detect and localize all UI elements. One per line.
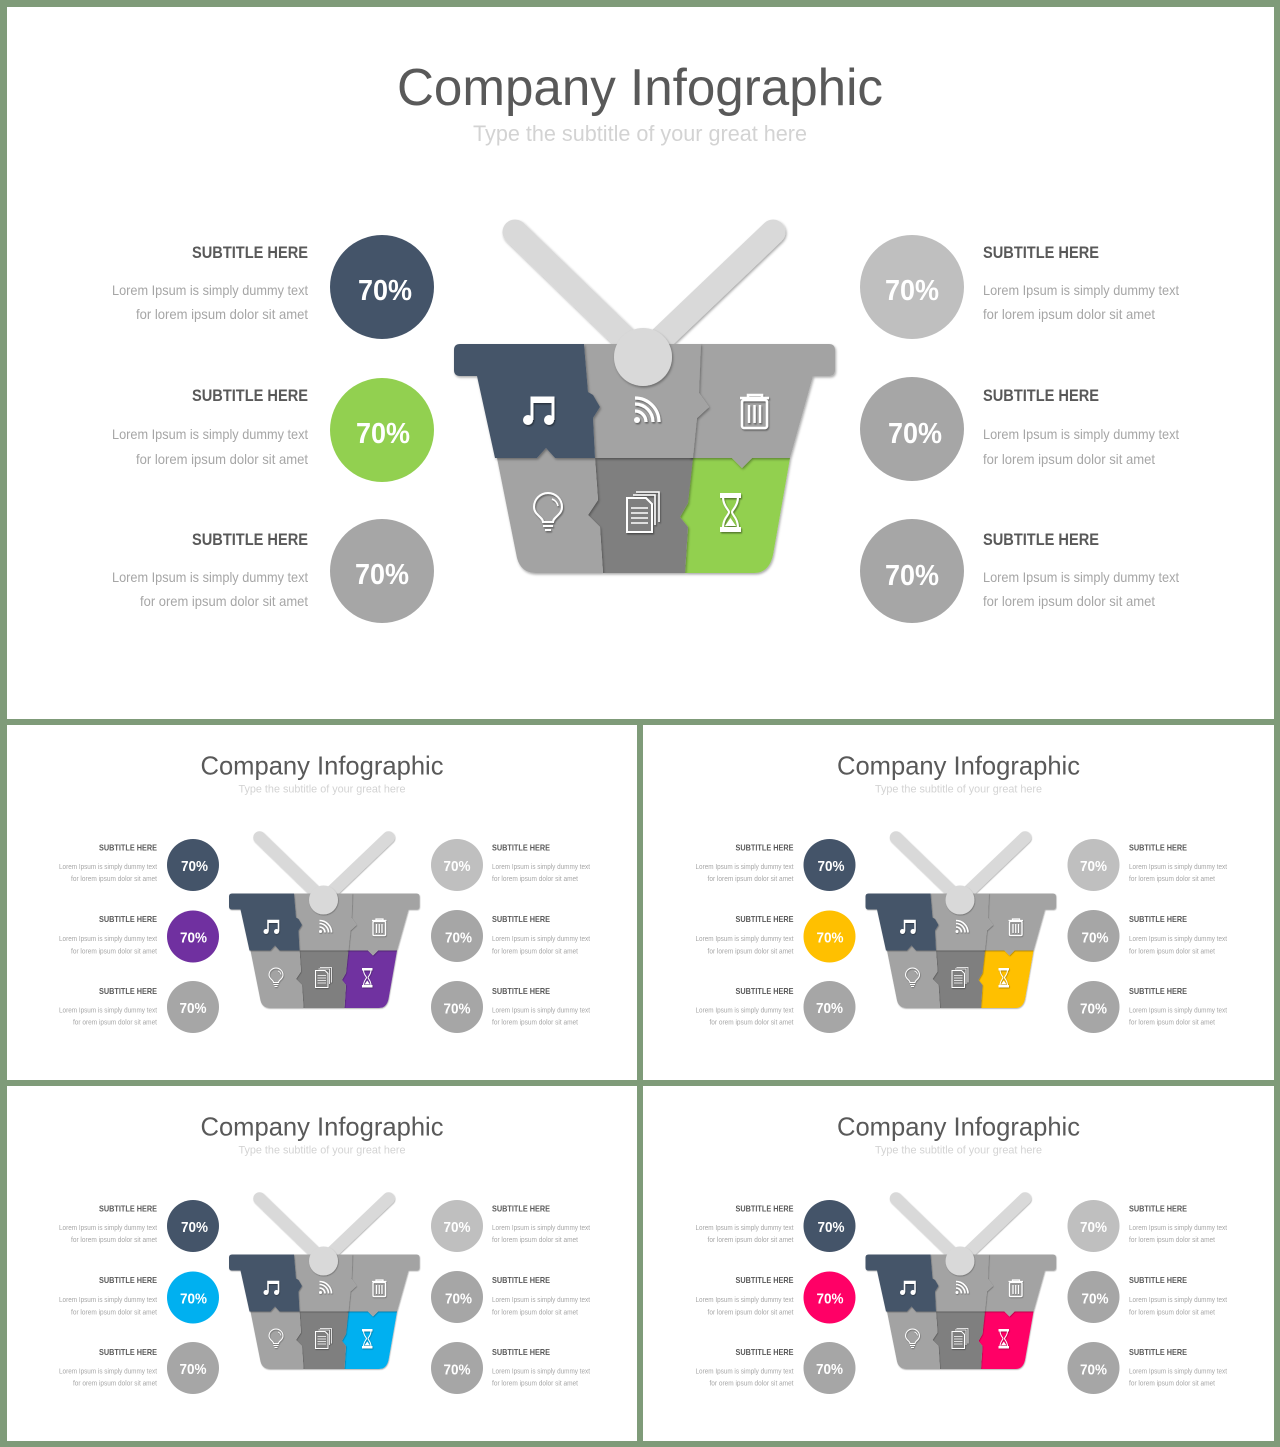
left text blocks: for lorem ipsum dolor sit amet bbox=[71, 948, 157, 956]
left circles: 70% bbox=[816, 1292, 844, 1308]
right text blocks: SUBTITLE HERE bbox=[492, 842, 550, 852]
text block: left row 1: SUBTITLE HERE bbox=[192, 243, 308, 262]
right circles: 70% bbox=[1080, 1002, 1107, 1018]
right circles: 70% bbox=[444, 1220, 471, 1236]
left text blocks: Lorem Ipsum is simply dummy text bbox=[59, 1008, 157, 1014]
right text blocks: SUBTITLE HERE bbox=[492, 986, 550, 996]
left text blocks: Lorem Ipsum is simply dummy text bbox=[59, 864, 157, 871]
left text blocks: Lorem Ipsum is simply dummy text bbox=[696, 1297, 794, 1304]
right circles bbox=[431, 839, 483, 1033]
left text blocks: Lorem Ipsum is simply dummy text bbox=[696, 1225, 794, 1232]
left text blocks: for lorem ipsum dolor sit amet bbox=[71, 1237, 157, 1244]
text block: left row 3 bbox=[112, 530, 308, 609]
subtitle: Type the subtitle of your great here bbox=[875, 1144, 1042, 1156]
left circles: 70% bbox=[181, 859, 208, 875]
circle: right 2: 70% bbox=[888, 418, 942, 450]
left text blocks bbox=[696, 1204, 794, 1388]
text block: left row 3: SUBTITLE HERE bbox=[192, 530, 308, 549]
circle: right 2 bbox=[860, 377, 964, 481]
left text blocks: SUBTITLE HERE bbox=[736, 1204, 794, 1214]
left text blocks: for lorem ipsum dolor sit amet bbox=[708, 948, 794, 956]
text block: left row 3: Lorem Ipsum is simply dummy text bbox=[112, 569, 308, 585]
right text blocks: SUBTITLE HERE bbox=[1129, 842, 1187, 852]
right text blocks: Lorem Ipsum is simply dummy text bbox=[1129, 1225, 1227, 1232]
right text blocks: for lorem ipsum dolor sit amet bbox=[1129, 1237, 1215, 1244]
left text blocks: for orem ipsum dolor sit amet bbox=[73, 1020, 157, 1026]
left circles: 70% bbox=[818, 859, 845, 875]
right circles: 70% bbox=[445, 930, 472, 946]
right circles: 70% bbox=[1082, 930, 1109, 946]
right text blocks: Lorem Ipsum is simply dummy text bbox=[492, 1368, 590, 1376]
right text blocks: SUBTITLE HERE bbox=[1129, 1347, 1187, 1357]
text block: left row 2: Lorem Ipsum is simply dummy text bbox=[112, 426, 308, 442]
left text blocks: for lorem ipsum dolor sit amet bbox=[71, 876, 157, 883]
circle: left 2 accent: 70% bbox=[356, 418, 410, 450]
left text blocks bbox=[696, 842, 794, 1026]
right circles: 70% bbox=[444, 859, 471, 875]
right text blocks: for lorem ipsum dolor sit amet bbox=[1129, 1310, 1215, 1316]
text block: right row 2: SUBTITLE HERE bbox=[983, 386, 1099, 405]
right circles: 70% bbox=[1082, 1292, 1109, 1308]
left text blocks: for orem ipsum dolor sit amet bbox=[73, 1380, 157, 1388]
subtitle: Type the subtitle of your great here bbox=[238, 1144, 406, 1156]
right text blocks: for lorem ipsum dolor sit amet bbox=[492, 1237, 578, 1244]
title: Company Infographic bbox=[837, 1112, 1080, 1142]
right text blocks: for lorem ipsum dolor sit amet bbox=[1129, 1380, 1215, 1388]
right circles: 70% bbox=[444, 1002, 471, 1018]
slide content: yellow bbox=[696, 750, 1227, 1033]
text block: right row 3: Lorem Ipsum is simply dummy text bbox=[983, 569, 1179, 585]
left text blocks: SUBTITLE HERE bbox=[99, 842, 157, 852]
text block: right row 1 bbox=[983, 243, 1179, 322]
text block: right row 1: Lorem Ipsum is simply dummy text bbox=[983, 282, 1179, 298]
left circles: 70% bbox=[180, 930, 207, 946]
panel: main slide bbox=[7, 7, 1274, 719]
panel: pink variant slide bbox=[643, 1086, 1274, 1441]
left text blocks: Lorem Ipsum is simply dummy text bbox=[696, 1368, 794, 1376]
left text blocks: Lorem Ipsum is simply dummy text bbox=[696, 936, 794, 943]
subtitle: Type the subtitle of your great here bbox=[473, 121, 807, 146]
left text blocks: SUBTITLE HERE bbox=[736, 842, 794, 852]
text block: right row 1: for lorem ipsum dolor sit amet bbox=[983, 306, 1155, 322]
left text blocks: for lorem ipsum dolor sit amet bbox=[708, 1237, 794, 1244]
right text blocks: for lorem ipsum dolor sit amet bbox=[492, 876, 578, 883]
right text blocks: Lorem Ipsum is simply dummy text bbox=[492, 864, 590, 871]
panel: purple variant slide bbox=[7, 725, 637, 1080]
slide content: pink bbox=[696, 1112, 1227, 1394]
left text blocks: Lorem Ipsum is simply dummy text bbox=[59, 1297, 157, 1304]
right text blocks: SUBTITLE HERE bbox=[492, 914, 550, 924]
left circles: 70% bbox=[818, 1220, 845, 1236]
right text blocks: Lorem Ipsum is simply dummy text bbox=[492, 1297, 590, 1304]
basket chart bbox=[866, 1198, 1056, 1369]
left text blocks: SUBTITLE HERE bbox=[99, 986, 157, 996]
left text blocks bbox=[59, 842, 157, 1026]
left text blocks: SUBTITLE HERE bbox=[736, 986, 794, 996]
text block: left row 1: for lorem ipsum dolor sit amet bbox=[136, 306, 308, 322]
left circles: 70% bbox=[180, 1292, 207, 1308]
right text blocks: SUBTITLE HERE bbox=[492, 1204, 550, 1214]
text block: right row 2 bbox=[983, 386, 1179, 467]
circle: right 1 bbox=[860, 235, 964, 339]
basket chart bbox=[229, 1198, 420, 1369]
left circles: 70% bbox=[181, 1220, 208, 1236]
right text blocks: Lorem Ipsum is simply dummy text bbox=[1129, 1008, 1227, 1014]
circle: left 2 accent bbox=[330, 378, 434, 482]
left text blocks: SUBTITLE HERE bbox=[736, 1347, 794, 1357]
left text blocks bbox=[59, 1204, 157, 1388]
text block: left row 2: for lorem ipsum dolor sit amet bbox=[136, 451, 308, 467]
right text blocks: for lorem ipsum dolor sit amet bbox=[1129, 876, 1215, 883]
right text blocks bbox=[1129, 1204, 1227, 1388]
left text blocks: for lorem ipsum dolor sit amet bbox=[708, 876, 794, 883]
left circles bbox=[167, 1200, 219, 1394]
left text blocks: SUBTITLE HERE bbox=[736, 914, 794, 924]
right circles: 70% bbox=[1080, 1220, 1107, 1236]
subtitle: Type the subtitle of your great here bbox=[238, 784, 406, 796]
right text blocks: for lorem ipsum dolor sit amet bbox=[492, 1380, 578, 1388]
text block: right row 3: for lorem ipsum dolor sit amet bbox=[983, 593, 1155, 609]
right circles: 70% bbox=[1080, 1362, 1107, 1378]
circle: right 3: 70% bbox=[885, 560, 939, 592]
circle: left 3: 70% bbox=[355, 559, 409, 591]
text block: right row 2: Lorem Ipsum is simply dummy text bbox=[983, 426, 1179, 442]
circle: left 3 bbox=[330, 519, 434, 623]
right circles bbox=[1068, 1200, 1120, 1394]
left text blocks: Lorem Ipsum is simply dummy text bbox=[696, 864, 794, 871]
circle: left 1 bbox=[330, 235, 434, 339]
title: Company Infographic bbox=[837, 750, 1080, 780]
slide content: purple bbox=[59, 750, 590, 1033]
right text blocks: SUBTITLE HERE bbox=[492, 1275, 550, 1285]
right circles bbox=[1068, 839, 1120, 1033]
slide content: blue bbox=[59, 1112, 590, 1394]
right text blocks bbox=[492, 1204, 590, 1388]
circle: right 1: 70% bbox=[885, 275, 939, 307]
text block: right row 1: SUBTITLE HERE bbox=[983, 243, 1099, 262]
right circles: 70% bbox=[444, 1362, 471, 1378]
left circles: 70% bbox=[816, 1001, 843, 1017]
right text blocks: for lorem ipsum dolor sit amet bbox=[492, 1310, 578, 1316]
subtitle: Type the subtitle of your great here bbox=[875, 784, 1042, 796]
left text blocks: Lorem Ipsum is simply dummy text bbox=[696, 1008, 794, 1014]
right text blocks: for lorem ipsum dolor sit amet bbox=[1129, 1020, 1215, 1026]
left text blocks: Lorem Ipsum is simply dummy text bbox=[59, 936, 157, 943]
right text blocks: Lorem Ipsum is simply dummy text bbox=[1129, 936, 1227, 943]
left circles: 70% bbox=[816, 930, 844, 946]
right circles bbox=[431, 1200, 483, 1394]
text block: left row 1 bbox=[112, 243, 308, 322]
left circles bbox=[804, 839, 856, 1033]
text block: right row 3 bbox=[983, 530, 1179, 609]
right circles: 70% bbox=[445, 1292, 472, 1308]
right text blocks: SUBTITLE HERE bbox=[1129, 1275, 1187, 1285]
right text blocks: SUBTITLE HERE bbox=[492, 1347, 550, 1357]
left circles bbox=[804, 1200, 856, 1394]
left circles: 70% bbox=[180, 1362, 207, 1378]
title: Company Infographic bbox=[200, 750, 444, 780]
left text blocks: for lorem ipsum dolor sit amet bbox=[708, 1310, 794, 1316]
left circles: 70% bbox=[816, 1362, 843, 1378]
left circles: 70% bbox=[180, 1001, 207, 1017]
left text blocks: for orem ipsum dolor sit amet bbox=[710, 1020, 794, 1026]
basket chart bbox=[866, 838, 1056, 1008]
text block: left row 2 bbox=[112, 386, 308, 467]
right text blocks bbox=[492, 842, 590, 1026]
text block: right row 3: SUBTITLE HERE bbox=[983, 530, 1099, 549]
basket chart bbox=[229, 838, 420, 1008]
left text blocks: SUBTITLE HERE bbox=[736, 1275, 794, 1285]
right text blocks bbox=[1129, 842, 1227, 1026]
circle: right 3 bbox=[860, 519, 964, 623]
left text blocks: SUBTITLE HERE bbox=[99, 1275, 157, 1285]
title: Company Infographic bbox=[397, 59, 883, 117]
right text blocks: Lorem Ipsum is simply dummy text bbox=[1129, 1368, 1227, 1376]
left text blocks: Lorem Ipsum is simply dummy text bbox=[59, 1368, 157, 1376]
right text blocks: for lorem ipsum dolor sit amet bbox=[492, 1020, 578, 1026]
right text blocks: Lorem Ipsum is simply dummy text bbox=[492, 1008, 590, 1014]
left circles bbox=[167, 839, 219, 1033]
left text blocks: SUBTITLE HERE bbox=[99, 1204, 157, 1214]
basket chart bbox=[454, 232, 835, 573]
text block: left row 2: SUBTITLE HERE bbox=[192, 386, 308, 405]
panel: blue variant slide bbox=[7, 1086, 637, 1441]
right text blocks: Lorem Ipsum is simply dummy text bbox=[1129, 864, 1227, 871]
panel: yellow variant slide bbox=[643, 725, 1274, 1080]
title: Company Infographic bbox=[200, 1112, 444, 1142]
circle: left 1: 70% bbox=[358, 275, 412, 307]
right circles: 70% bbox=[1080, 859, 1107, 875]
text block: right row 2: for lorem ipsum dolor sit amet bbox=[983, 451, 1155, 467]
right text blocks: SUBTITLE HERE bbox=[1129, 1204, 1187, 1214]
right text blocks: SUBTITLE HERE bbox=[1129, 986, 1187, 996]
left text blocks: for orem ipsum dolor sit amet bbox=[710, 1380, 794, 1388]
left text blocks: Lorem Ipsum is simply dummy text bbox=[59, 1225, 157, 1232]
right text blocks: for lorem ipsum dolor sit amet bbox=[1129, 948, 1215, 956]
left text blocks: for lorem ipsum dolor sit amet bbox=[71, 1310, 157, 1316]
right text blocks: for lorem ipsum dolor sit amet bbox=[492, 948, 578, 956]
text block: left row 1: Lorem Ipsum is simply dummy text bbox=[112, 282, 308, 298]
left text blocks: SUBTITLE HERE bbox=[99, 1347, 157, 1357]
right text blocks: Lorem Ipsum is simply dummy text bbox=[492, 1225, 590, 1232]
text block: left row 3: for orem ipsum dolor sit amet bbox=[140, 593, 308, 609]
right text blocks: Lorem Ipsum is simply dummy text bbox=[1129, 1297, 1227, 1304]
right text blocks: SUBTITLE HERE bbox=[1129, 914, 1187, 924]
right text blocks: Lorem Ipsum is simply dummy text bbox=[492, 936, 590, 943]
left text blocks: SUBTITLE HERE bbox=[99, 914, 157, 924]
